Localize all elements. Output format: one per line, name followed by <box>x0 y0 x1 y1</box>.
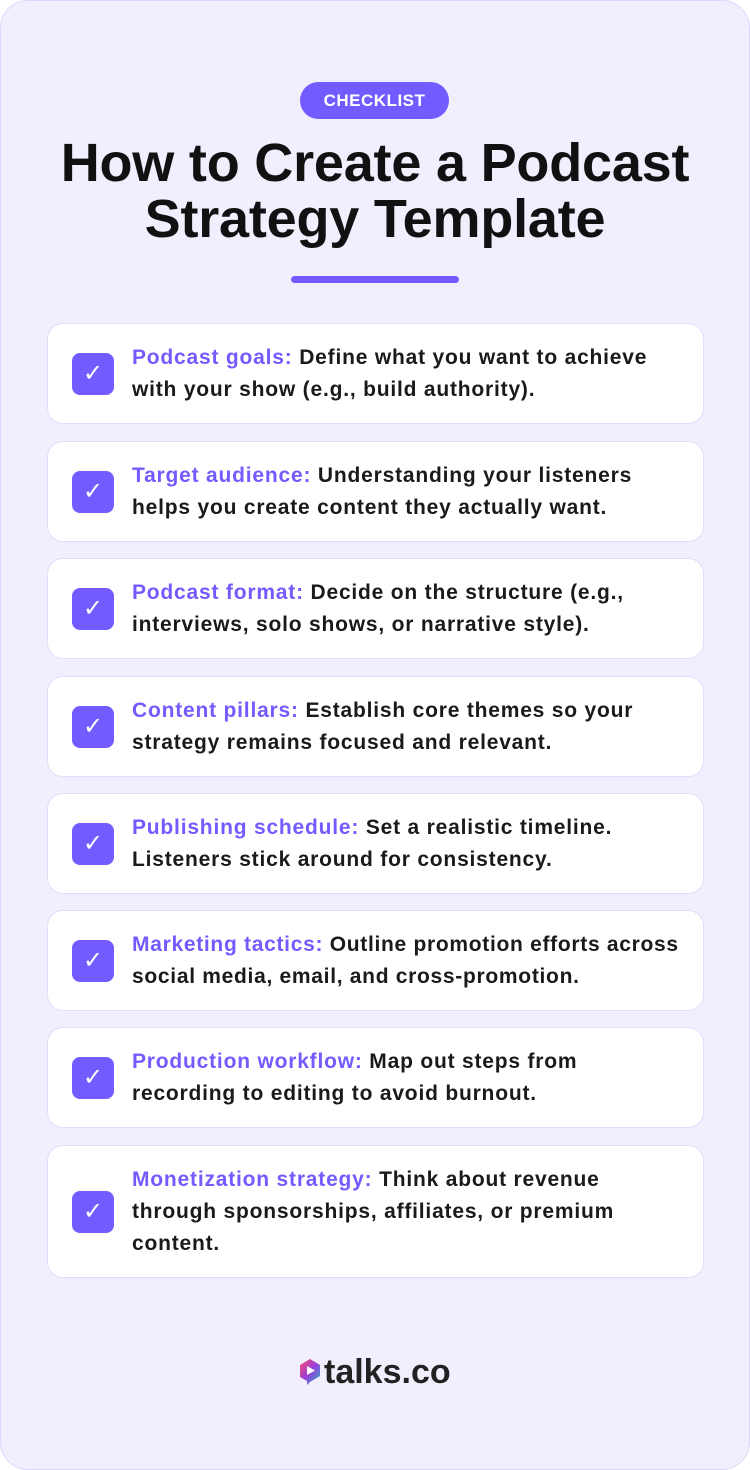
text: publishing schedule: Listeners stick around for consistency. <box>132 848 553 871</box>
icon: checkbox: ✓ <box>83 478 103 505</box>
icon: checkbox: ✓ <box>83 595 103 622</box>
icon: checkbox <box>72 940 114 982</box>
text: marketing tactics: social media, email, and cross-promotion. <box>132 965 580 988</box>
text: podcast goals: with your show (e.g., build authority). <box>132 378 535 401</box>
text: production workflow: Production workflow: Map out steps from <box>132 1050 577 1073</box>
icon: checkbox <box>72 588 114 630</box>
text: podcast format: Podcast format: Decide on the structure (e.g., <box>132 581 624 604</box>
icon: checkbox: ✓ <box>83 360 103 387</box>
icon: checkbox: ✓ <box>83 947 103 974</box>
text: production workflow: recording to editing to avoid burnout. <box>132 1082 537 1105</box>
icon: logo mark <box>300 1359 320 1385</box>
text: monetization strategy <box>132 1168 614 1255</box>
text: publishing schedule: Publishing schedule: Set a realistic timeline. <box>132 816 612 839</box>
text: target audience: helps you create content they actually want. <box>132 496 607 519</box>
badge: checklist: CHECKLIST <box>324 91 425 110</box>
icon: checkbox: ✓ <box>83 830 103 857</box>
text: production workflow <box>132 1050 577 1105</box>
title: Strategy Template <box>145 189 605 249</box>
card: monetization strategy <box>47 1145 704 1278</box>
card: podcast format <box>47 558 704 659</box>
text: target audience <box>132 464 632 519</box>
icon: checkbox: ✓ <box>83 713 103 740</box>
text: monetization strategy: through sponsorships, affiliates, or premium <box>132 1200 614 1223</box>
icon: checkbox: ✓ <box>83 1198 103 1225</box>
icon: checkbox <box>72 1191 114 1233</box>
text: publishing schedule <box>132 816 612 871</box>
title: How to Create a Podcast <box>61 133 689 193</box>
text: podcast format: interviews, solo shows, or narrative style). <box>132 613 590 636</box>
card: publishing schedule <box>47 793 704 894</box>
text: target audience: Target audience: Understanding your listeners <box>132 464 632 487</box>
text: monetization strategy: content. <box>132 1232 220 1255</box>
text: podcast goals: Podcast goals: Define what you want to achieve <box>132 346 647 369</box>
icon: checkbox <box>72 1057 114 1099</box>
card: target audience <box>47 441 704 542</box>
card: podcast goals <box>47 323 704 424</box>
text: content pillars <box>132 699 633 754</box>
text: marketing tactics: Marketing tactics: Outline promotion efforts across <box>132 933 679 956</box>
card: production workflow <box>47 1027 704 1128</box>
icon: checkbox <box>72 353 114 395</box>
text: monetization strategy: Monetization strategy: Think about revenue <box>132 1168 600 1191</box>
text: marketing tactics <box>132 933 679 988</box>
text: podcast format <box>132 581 624 636</box>
title underline <box>291 276 459 283</box>
title <box>61 133 689 249</box>
icon: checkbox: ✓ <box>83 1064 103 1091</box>
icon: checkbox <box>72 823 114 865</box>
logo text: talks.co <box>324 1353 451 1391</box>
logo: talks.co <box>300 1353 451 1391</box>
text: content pillars: Content pillars: Establish core themes so your <box>132 699 633 722</box>
text: content pillars: strategy remains focused and relevant. <box>132 731 552 754</box>
card: content pillars <box>47 676 704 777</box>
icon: checkbox <box>72 706 114 748</box>
card: marketing tactics <box>47 910 704 1011</box>
icon: checkbox <box>72 471 114 513</box>
badge: checklist <box>300 82 449 119</box>
text: podcast goals <box>132 346 647 401</box>
